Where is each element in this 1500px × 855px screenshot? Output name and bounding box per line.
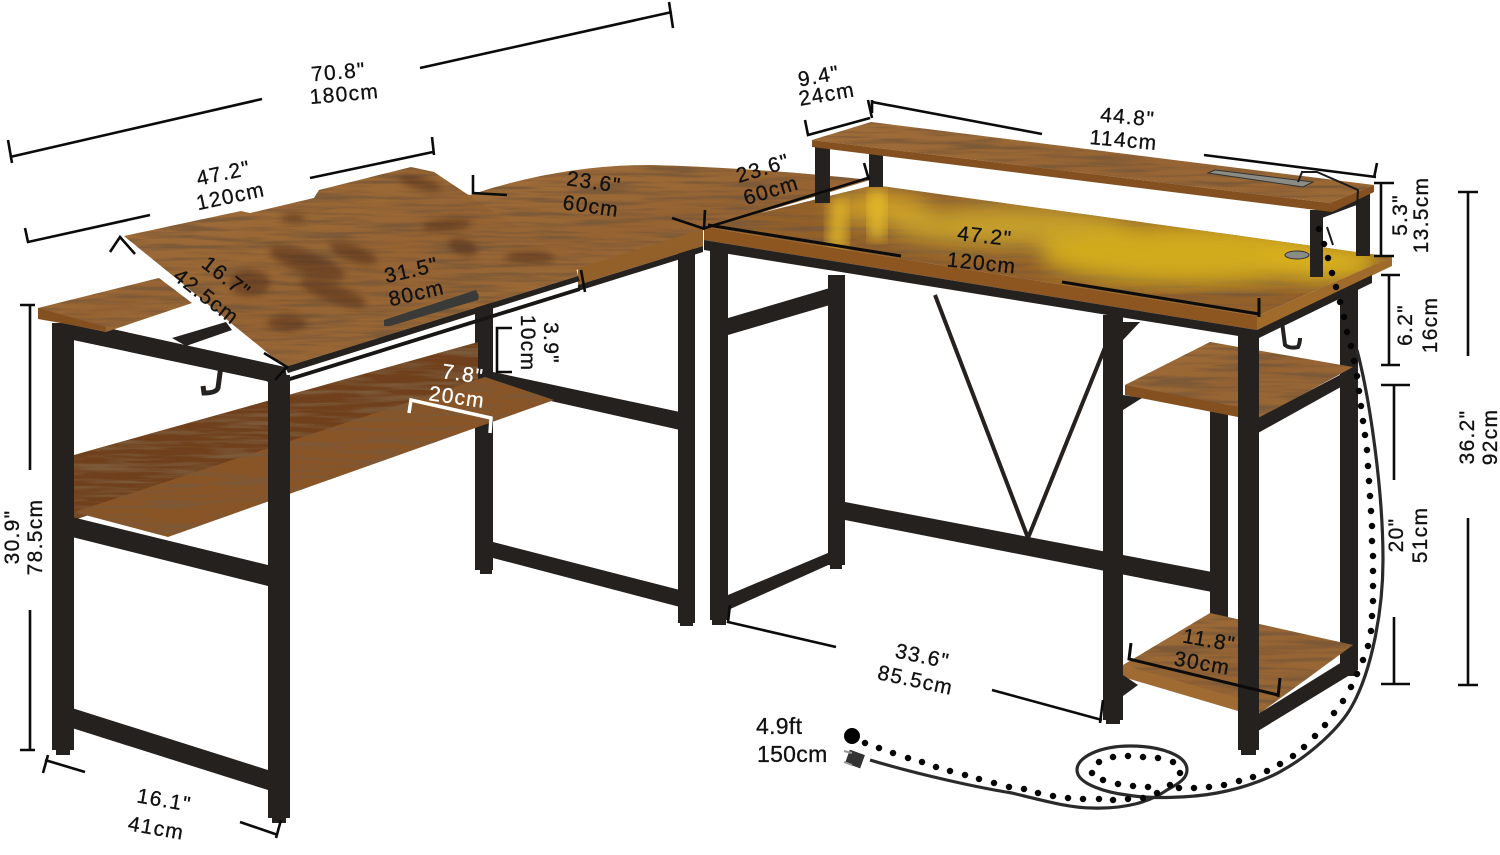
icon: headphone hook right xyxy=(1282,322,1300,348)
dimension: left desk depth 16.1 in: 41cm xyxy=(126,812,186,845)
icon: headphone hook left xyxy=(203,358,222,393)
dimension: desk depth 33.6 in: 33.6" xyxy=(893,640,952,674)
panel: lower storage shelf xyxy=(1123,613,1358,731)
dimension: total width 70.8 in xyxy=(8,2,673,163)
dimension: left desk height 30.9 in: 30.9" xyxy=(1,510,24,564)
dimension: left desk height 30.9 in: 78.5cm xyxy=(24,499,47,575)
dimension: narrow shelf depth 7.8 in: 20cm xyxy=(427,382,487,413)
dimension: LED strip length 4.9 ft xyxy=(756,713,828,767)
dimension: board rise 3.9 in: 3.9" xyxy=(539,322,562,364)
icon: power strip on monitor stand xyxy=(1208,170,1313,187)
frame: right desk legs xyxy=(710,245,1358,676)
panel: corner desktop xyxy=(450,165,870,291)
dimension: shelf height 20 in: 51cm xyxy=(1409,507,1432,563)
dimension: right desk width 47.2 in: 47.2" xyxy=(956,222,1013,251)
icon: power cord from strip xyxy=(1298,172,1358,245)
dimension: board depth 16.7 in xyxy=(110,237,287,380)
dimension: board width 31.5 in xyxy=(382,253,585,311)
panel: middle storage shelf xyxy=(1125,342,1357,433)
dimension: board rise 3.9 in xyxy=(497,315,562,372)
dimension: board width 31.5 in: 31.5" xyxy=(382,253,441,288)
dimension: right desk width 47.2 in xyxy=(708,222,1259,317)
dimension: shelf height 20 in xyxy=(1381,385,1432,684)
icon: desktop cable grommet xyxy=(1285,251,1309,259)
icon: black power cord with loop and plug xyxy=(844,350,1383,808)
dimension: board depth 16.7 in: 42.5cm xyxy=(169,264,243,330)
dimension: under desk clearance 6.2 in: 16cm xyxy=(1419,297,1442,353)
dimension: corner section right 23.6 in xyxy=(672,150,869,229)
dimension: corner section left 23.6 in xyxy=(473,167,623,222)
dimension: lower shelf width 11.8 in xyxy=(1129,625,1280,697)
dimension: under desk clearance 6.2 in xyxy=(1381,275,1442,365)
dimension: LED strip length 4.9 ft: 4.9ft xyxy=(756,713,803,739)
dimension: board depth 16.7 in: 16.7" xyxy=(197,252,255,304)
dimension: left desk width 47.2 in: 47.2" xyxy=(194,157,253,191)
dimension: under desk clearance 6.2 in: 6.2" xyxy=(1394,304,1417,346)
dimension: total height 36.2 in xyxy=(1456,192,1500,685)
panel: main desktop with LED glow xyxy=(704,185,1392,339)
dimension: board width 31.5 in: 80cm xyxy=(386,276,447,311)
dimension: monitor stand width 44.8 in: 114cm xyxy=(1089,126,1158,155)
dimension: desk depth 33.6 in xyxy=(728,605,1103,723)
dimension: monitor stand depth 9.4 in: 9.4" xyxy=(796,62,841,92)
panel: wooden back board and narrow shelf xyxy=(74,342,554,537)
dimension: monitor stand depth 9.4 in: 24cm xyxy=(797,78,857,111)
dimension: left desk depth 16.1 in: 16.1" xyxy=(135,785,193,817)
dimension: desk depth 33.6 in: 85.5cm xyxy=(875,661,955,700)
dimension: lower shelf width 11.8 in: 11.8" xyxy=(1181,625,1237,657)
frame: right desk front legs xyxy=(1103,315,1259,755)
dimension: shelf height 20 in: 20" xyxy=(1385,518,1408,552)
panel: monitor stand shelf xyxy=(812,122,1374,212)
dimension: total width 70.8 in: 180cm xyxy=(309,80,380,109)
dimension: monitor stand depth 9.4 in xyxy=(796,62,872,135)
dimension: monitor stand width 44.8 in xyxy=(872,100,1377,178)
dimension: total height 36.2 in: 36.2" xyxy=(1456,410,1479,464)
icon: pencil ledge on board xyxy=(384,290,479,326)
dimension: corner section right 23.6 in: 60cm xyxy=(741,172,802,210)
dimension: LED strip length 4.9 ft: 150cm xyxy=(757,741,828,767)
dimension: narrow shelf depth 7.8 in: 7.8" xyxy=(441,360,485,389)
icon: LED strip drawn as dotted line xyxy=(844,229,1373,800)
dimension: total width 70.8 in: 70.8" xyxy=(310,59,367,86)
dimension: narrow shelf depth 7.8 in xyxy=(409,360,491,433)
frame: left desk back section xyxy=(475,245,695,626)
dimension: corner section right 23.6 in: 23.6" xyxy=(734,150,793,188)
dimension: left desk width 47.2 in: 120cm xyxy=(194,178,267,215)
dimension: lower shelf width 11.8 in: 30cm xyxy=(1172,647,1232,680)
dimension: stand height 5.3 in xyxy=(1374,177,1433,256)
dimension: left desk depth 16.1 in xyxy=(43,755,281,845)
dimension: corner section left 23.6 in: 23.6" xyxy=(565,167,623,198)
panel: left desk rear slat xyxy=(38,278,192,332)
frame: left desk legs and rails xyxy=(52,318,290,823)
dimension: stand height 5.3 in: 5.3" xyxy=(1389,194,1412,236)
dimension: right desk width 47.2 in: 120cm xyxy=(946,248,1017,279)
frame: monitor stand legs xyxy=(815,147,1370,277)
dimension: stand height 5.3 in: 13.5cm xyxy=(1410,177,1433,253)
dimension: corner section left 23.6 in: 60cm xyxy=(561,191,621,222)
dimension: left desk height 30.9 in xyxy=(1,305,47,750)
dimension: left desk width 47.2 in xyxy=(25,137,434,242)
dimension: monitor stand width 44.8 in: 44.8" xyxy=(1099,104,1156,131)
dimension: board rise 3.9 in: 10cm xyxy=(516,315,539,371)
panel: tilting drafting board xyxy=(124,167,580,381)
